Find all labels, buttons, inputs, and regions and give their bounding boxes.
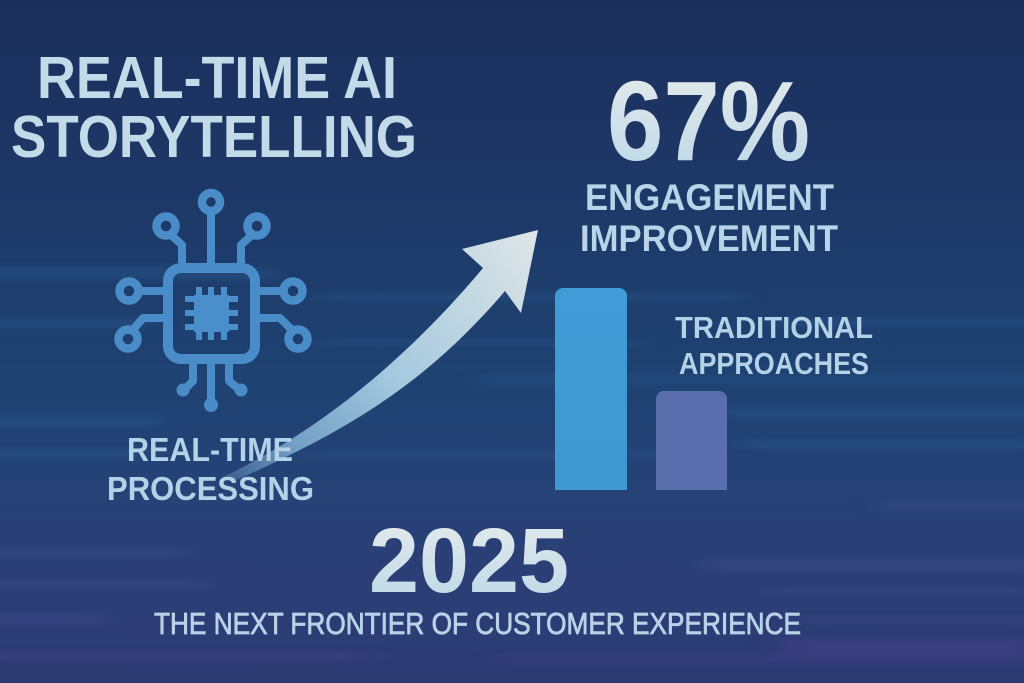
chip core (185, 287, 238, 340)
stat label: engagement improvement (580, 177, 838, 259)
label: real-time processing: REAL-TIME (127, 431, 293, 468)
stat: 67%: 67% (607, 58, 810, 184)
year: 2025: 2025 (369, 510, 569, 612)
bar: traditional approaches (656, 391, 727, 490)
terminal dots (176, 384, 248, 412)
stat label: engagement improvement: ENGAGEMENT (585, 177, 834, 218)
title: REAL-TIME AI (37, 45, 397, 111)
stat label: engagement improvement: IMPROVEMENT (580, 218, 838, 259)
terminal rings (118, 193, 308, 348)
arrow (223, 230, 538, 482)
title (11, 45, 417, 170)
icon: AI chip (118, 193, 308, 412)
bar: real-time AI (555, 288, 627, 490)
bar chart (555, 288, 727, 490)
label: traditional approaches (675, 310, 873, 381)
label: real-time processing (107, 431, 314, 507)
label: traditional approaches: APPROACHES (679, 346, 869, 381)
label: real-time processing: PROCESSING (107, 470, 314, 507)
label: traditional approaches: TRADITIONAL (675, 310, 873, 345)
chip body (168, 268, 255, 359)
title: STORYTELLING (11, 104, 417, 170)
tagline: THE NEXT FRONTIER OF CUSTOMER EXPERIENCE (154, 606, 801, 641)
circuit traces (132, 212, 293, 400)
